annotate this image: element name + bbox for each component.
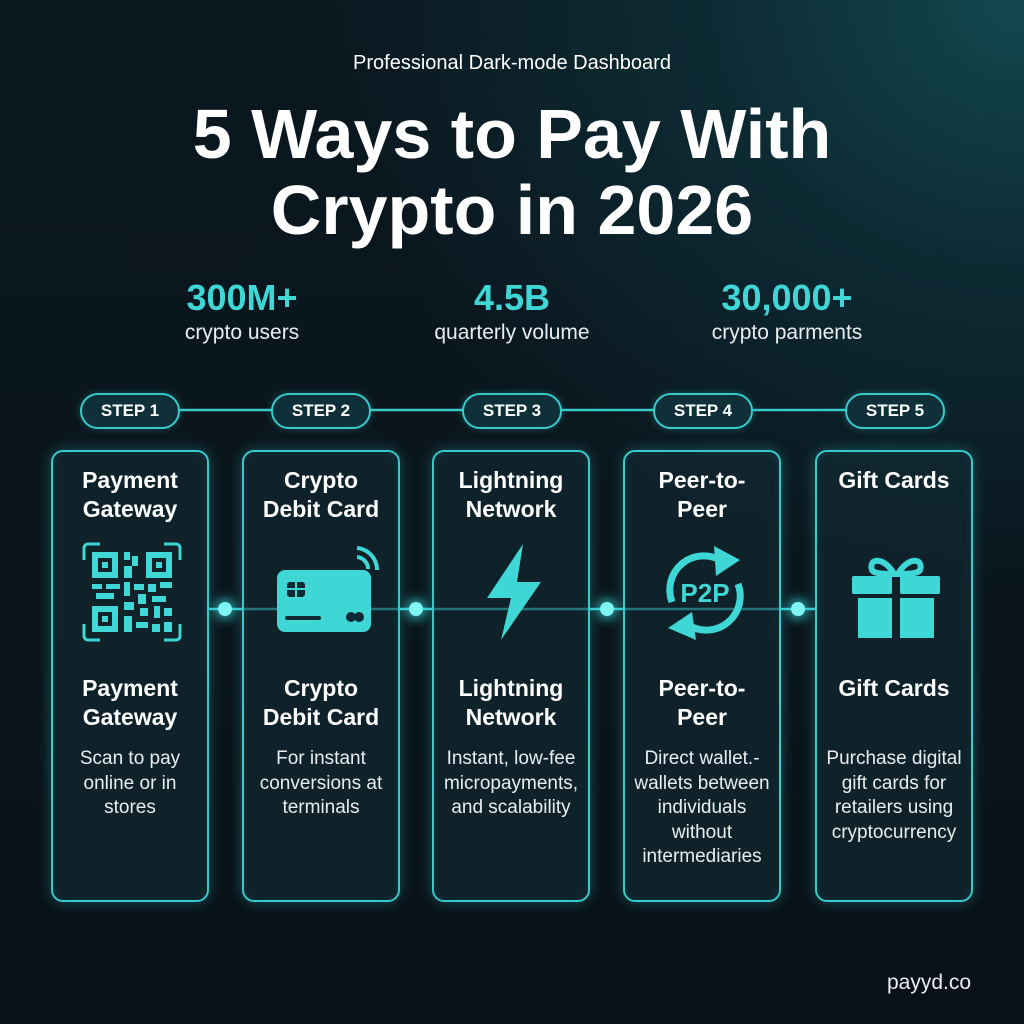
card 4: peer-to-peer: intermediaries (642, 846, 762, 867)
stat: payments: crypto parments (712, 321, 862, 344)
card 5: gift cards: Gift Cards (838, 467, 950, 493)
card 5: gift cards: cryptocurrency (832, 822, 956, 842)
stat: payments (712, 277, 862, 344)
title: Crypto in 2026 (271, 171, 753, 249)
pill 1 (80, 393, 180, 429)
card 4: peer-to-peer: wallets between (634, 772, 770, 794)
pill 3 (462, 393, 562, 429)
pill 2: STEP 2 (292, 401, 350, 420)
card 2: crypto debit card: Debit Card (263, 704, 379, 730)
icon: P2P arrows (666, 546, 744, 640)
card 5: gift cards: retailers using (835, 797, 953, 818)
icon: QR code (82, 542, 182, 642)
card 4: peer-to-peer: Peer-to- (659, 467, 745, 493)
card 4: peer-to-peer: without (672, 822, 732, 842)
card 1: payment gateway (51, 450, 209, 902)
card 5: gift cards: gift cards for (842, 772, 946, 794)
icon: gift box (852, 558, 940, 638)
card 2: crypto debit card (242, 450, 400, 902)
card 1: payment gateway: Payment (82, 467, 178, 493)
title: 5 Ways to Pay With (193, 95, 831, 173)
card 1: payment gateway: online or in (84, 772, 176, 794)
glowing dots (209, 592, 814, 626)
step pills (76, 389, 948, 433)
card 2: crypto debit card: For instant (276, 748, 366, 769)
pill 4 (653, 393, 753, 429)
card 4: peer-to-peer: Peer-to- (659, 675, 745, 701)
card 3: lightning network: Network (466, 704, 556, 730)
icon: debit card (277, 546, 379, 632)
card 2: crypto debit card: Debit Card (263, 496, 379, 522)
stat: volume (434, 277, 590, 344)
pill 5: STEP 5 (866, 401, 924, 420)
card 3: lightning network: micropayments, (444, 772, 578, 794)
stats row (185, 277, 862, 344)
icon: lightning bolt (487, 544, 541, 640)
card 3: lightning network (432, 450, 590, 902)
stat: volume: 4.5B (474, 277, 550, 318)
subtitle: Professional Dark-mode Dashboard (353, 52, 671, 74)
card 4: peer-to-peer: individuals (658, 797, 746, 818)
pill 1: STEP 1 (101, 401, 159, 420)
card 1: payment gateway: Scan to pay (80, 748, 180, 769)
stat: users: crypto users (185, 321, 299, 344)
card 4: peer-to-peer: Direct wallet.- (644, 748, 760, 769)
card 2: crypto debit card: conversions at (260, 772, 382, 794)
pill 5 (845, 393, 945, 429)
card 2: crypto debit card: terminals (282, 797, 360, 818)
footer brand: payyd.co (887, 971, 971, 994)
pill 3: STEP 3 (483, 401, 541, 420)
stat: users (185, 277, 299, 344)
card 4: peer-to-peer: Peer (677, 704, 727, 730)
pill 2 (271, 393, 371, 429)
stat: payments: 30,000+ (721, 277, 853, 318)
card 3: lightning network: Lightning (459, 467, 563, 493)
pill 4: STEP 4 (674, 401, 732, 420)
card 2: crypto debit card: Crypto (284, 675, 358, 701)
card 1: payment gateway: Gateway (83, 496, 177, 522)
card 3: lightning network: Instant, low-fee (447, 748, 575, 769)
stat: volume: quarterly volume (434, 321, 590, 344)
icon: P2P arrows: P2P (680, 578, 730, 608)
stat: users: 300M+ (186, 277, 298, 318)
card 5: gift cards: Gift Cards (838, 675, 950, 701)
card 2: crypto debit card: Crypto (284, 467, 358, 493)
card 1: payment gateway: Payment (82, 675, 178, 701)
card 4: peer-to-peer (623, 450, 781, 902)
title (193, 95, 831, 249)
card 4: peer-to-peer: Peer (677, 496, 727, 522)
card 3: lightning network: Network (466, 496, 556, 522)
card 1: payment gateway: stores (104, 797, 156, 818)
card 1: payment gateway: Gateway (83, 704, 177, 730)
card 5: gift cards: Purchase digital (826, 748, 962, 769)
card 3: lightning network: and scalability (451, 797, 571, 818)
card 5: gift cards (815, 450, 973, 902)
card 3: lightning network: Lightning (459, 675, 563, 701)
